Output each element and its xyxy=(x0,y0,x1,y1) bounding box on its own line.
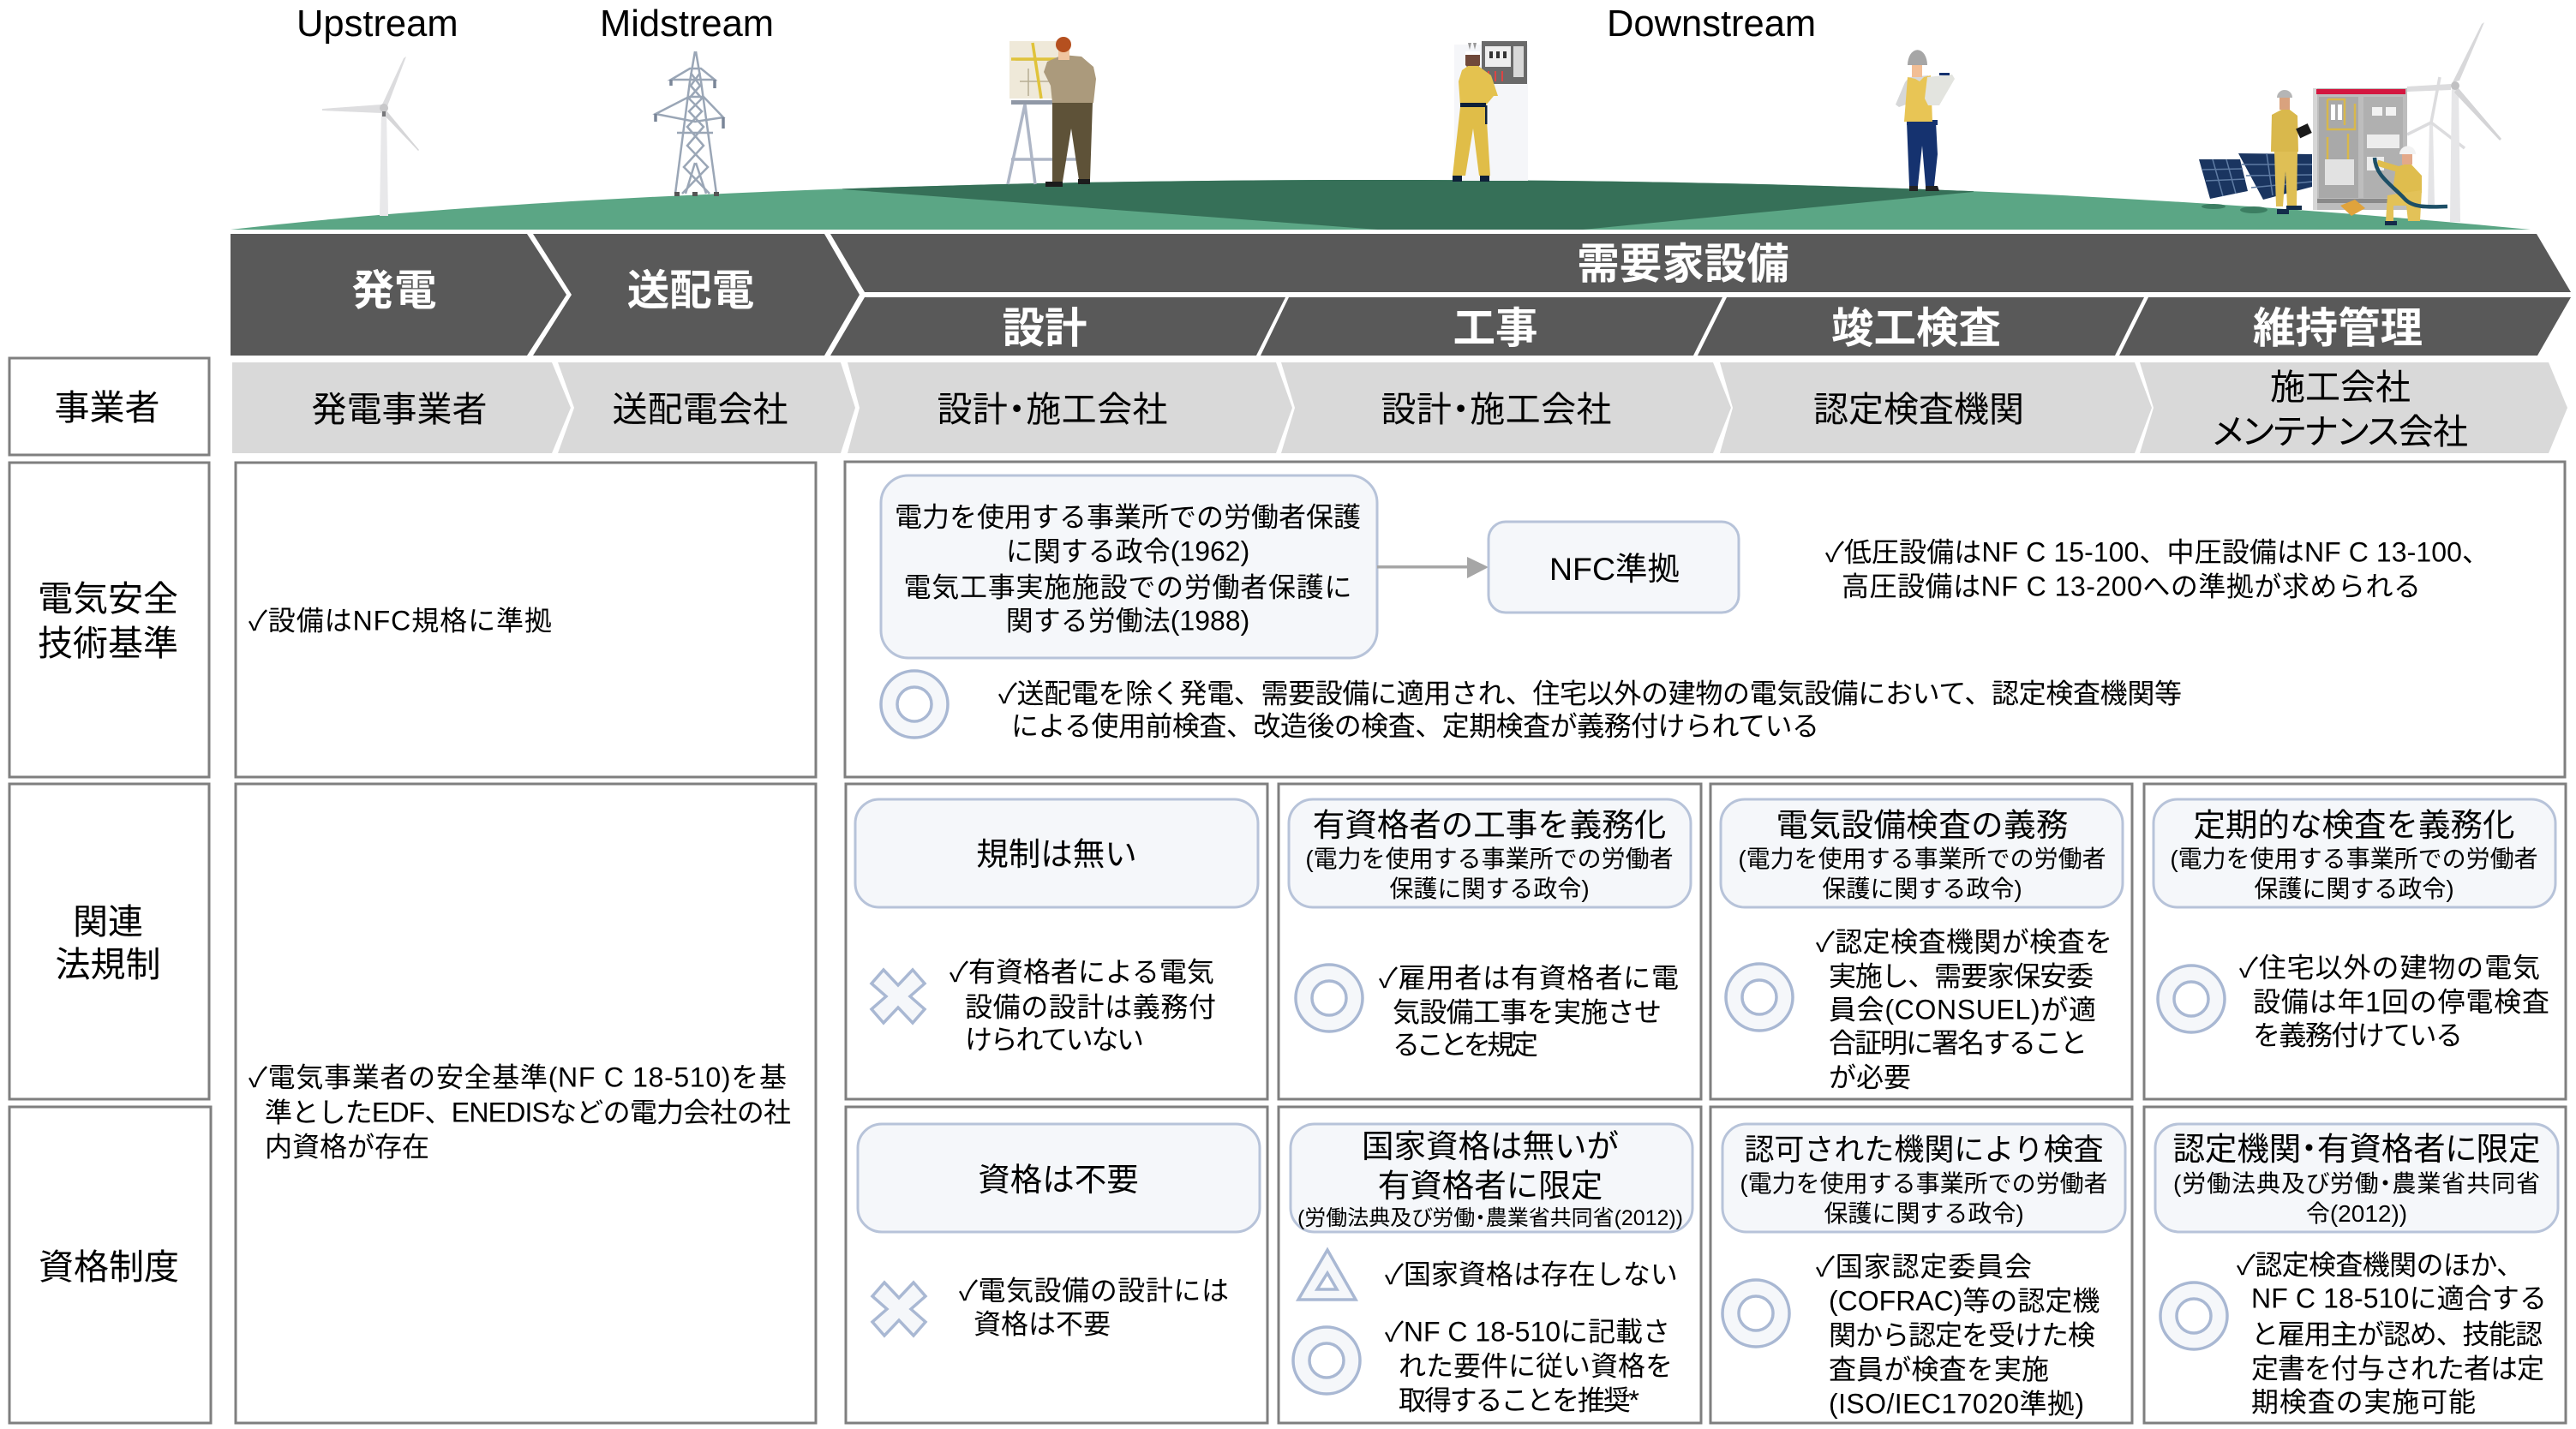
panel: regulation - construction xyxy=(1279,784,1701,1099)
text block: 実施し、需要家保安委 xyxy=(1829,961,2094,992)
heading: Midstream: Midstream xyxy=(600,3,774,45)
text block xyxy=(1816,1251,2100,1419)
callout: accredited and qualified: 令(2012)) xyxy=(2306,1200,2407,1227)
text block: 合証明に署名すること xyxy=(1829,1028,2088,1059)
callout: accredited bodies: 認可された機関により検査 xyxy=(1744,1133,2104,1167)
operator: maintenance: メンテナンス会社 xyxy=(2213,412,2468,451)
text block xyxy=(1379,963,1679,1061)
text block: ✓認定検査機関が検査を xyxy=(1816,927,2112,958)
green hill landscape xyxy=(231,180,2530,230)
text block: recommended qualification xyxy=(1385,1316,1673,1415)
large wind turbine xyxy=(2407,22,2501,222)
callout: no regulation: 規制は無い xyxy=(976,836,1137,872)
operator: construction xyxy=(1281,362,1731,453)
text block: を義務付けている xyxy=(2253,1019,2463,1050)
panel: regulation - maintenance xyxy=(2144,784,2566,1099)
value chain chevrons xyxy=(231,234,2571,356)
callout: inspection duty xyxy=(1721,799,2123,907)
row label: qualification system: 資格制度 xyxy=(39,1247,179,1287)
chevron: completion inspection: 竣工検査 xyxy=(1831,305,2001,352)
panel: regulation - design xyxy=(846,784,1267,1099)
callout: inspection duty: 保護に関する政令) xyxy=(1822,876,2022,902)
row label: electrical safety standards: 電気安全 xyxy=(38,579,178,619)
icon: electrician at panel xyxy=(1453,41,1528,182)
chevron: generation xyxy=(231,234,566,356)
electrical cabinet xyxy=(2313,88,2407,210)
panel: qualification - construction xyxy=(1279,1107,1701,1423)
panel: generation and grid standards: ✓設備はNFC規格に準拠 xyxy=(249,605,552,636)
operator: grid: 送配電会社 xyxy=(612,390,788,429)
heading: Downstream: Downstream xyxy=(1607,3,1816,45)
solar panels xyxy=(2199,153,2312,213)
text block: 期検査の実施可能 xyxy=(2251,1386,2476,1417)
panel: generation and grid regulation and qualification: 内資格が存在 xyxy=(265,1131,429,1162)
text block: けられていない xyxy=(965,1025,1144,1055)
text block: ることを規定 xyxy=(1393,1030,1538,1061)
chevron: customer facilities: 需要家設備 xyxy=(1577,241,1789,288)
operator: generation: 発電事業者 xyxy=(312,390,487,429)
chevron: construction xyxy=(1261,297,1722,356)
row label: related regulation xyxy=(9,784,209,1099)
text block: 資格は不要 xyxy=(973,1309,1111,1340)
text block: mandated inspections: ✓送配電を除く発電、需要設備に適用され、住宅以外の建物の電気設備において、認定検査機関等 xyxy=(998,679,2182,709)
chevron: maintenance xyxy=(2119,297,2571,356)
icon: renewable site with panels, cabinet, workers and turbines xyxy=(2199,22,2501,225)
chevron: transmission and distribution: 送配電 xyxy=(627,267,754,314)
operator: maintenance: 施工会社 xyxy=(2270,368,2411,407)
text block: ✓雇用者は有資格者に電 xyxy=(1379,963,1679,994)
text block: recommended qualification: 取得することを推奨* xyxy=(1399,1384,1639,1415)
row label: electrical safety standards: 技術基準 xyxy=(38,624,178,663)
icon: circle rating xyxy=(1293,1327,1360,1394)
chevron: customer facilities xyxy=(830,234,2571,292)
icon: cross rating xyxy=(872,1283,926,1336)
panel: qualification - maintenance xyxy=(2144,1107,2566,1423)
kneeling worker with hose xyxy=(2375,146,2447,225)
chevron: generation: 発電 xyxy=(351,267,437,314)
callout: periodic inspection: 定期的な検査を義務化 xyxy=(2194,807,2514,843)
callout: qualified work required xyxy=(1289,799,1691,907)
row label: qualification system xyxy=(9,1107,211,1423)
callout: accredited and qualified xyxy=(2155,1124,2558,1232)
text block: 員会(CONSUEL)が適 xyxy=(1829,994,2096,1025)
icon: circle rating xyxy=(1296,965,1363,1031)
callout: periodic inspection: (電力を使用する事業所での労働者 xyxy=(2170,846,2538,872)
callout: no regulation xyxy=(855,799,1258,907)
text block: 気設備工事を実施させ xyxy=(1393,997,1662,1028)
row label: related regulation: 法規制 xyxy=(55,945,161,984)
text block: voltage standards: 高圧設備はNF C 13-200への準拠が求められる xyxy=(1842,571,2421,601)
text block: 関から認定を受けた検 xyxy=(1829,1319,2095,1350)
panel: regulation - inspection xyxy=(1710,784,2132,1099)
standing worker xyxy=(2271,90,2312,214)
callout: accredited bodies xyxy=(1722,1124,2125,1232)
panel: generation and grid regulation and qualification: ✓電気事業者の安全基準(NF C 18-510)を基 xyxy=(249,1062,787,1093)
text block: recommended qualification: ✓NF C 18-510に記載さ xyxy=(1385,1316,1670,1347)
icon: circle rating xyxy=(881,671,948,738)
callout: limited to qualified persons xyxy=(1291,1124,1692,1232)
text block: mandated inspections xyxy=(998,679,2182,742)
callout: qualified work required: (電力を使用する事業所での労働者 xyxy=(1305,846,1674,872)
heading: Upstream: Upstream xyxy=(297,3,458,45)
text block: NF C 18-510に適合する xyxy=(2251,1283,2547,1314)
text block xyxy=(2237,1249,2547,1417)
callout: no qualification xyxy=(858,1124,1260,1232)
text block: mandated inspections: による使用前検査、改造後の検査、定期検査が義務付けられている xyxy=(1011,711,1819,742)
callout: inspection duty: (電力を使用する事業所での労働者 xyxy=(1738,846,2106,872)
chevron: completion inspection xyxy=(1698,297,2144,356)
callout: accredited and qualified: 認定機関・有資格者に限定 xyxy=(2173,1131,2540,1167)
text block xyxy=(959,1275,1229,1340)
icon: circle rating xyxy=(2160,1283,2227,1349)
text block: voltage standards xyxy=(1825,536,2489,601)
arrow xyxy=(1377,557,1489,578)
text block: と雇用主が認め、技能認 xyxy=(2251,1319,2543,1350)
text block: 定書を付与された者は定 xyxy=(2251,1354,2544,1384)
callout: limited to qualified persons: 有資格者に限定 xyxy=(1378,1168,1603,1204)
icon: wind turbine xyxy=(322,57,419,216)
callout: accredited bodies: (電力を使用する事業所での労働者 xyxy=(1740,1170,2108,1197)
callout: accredited bodies: 保護に関する政令) xyxy=(1824,1200,2024,1227)
panel: generation and grid regulation and qualification xyxy=(236,784,816,1423)
text block: ✓住宅以外の建物の電気 xyxy=(2239,953,2540,984)
chevron: transmission and distribution xyxy=(533,234,860,356)
callout: labour decrees: 電気工事実施施設での労働者保護に xyxy=(903,572,1352,603)
chevron: construction: 工事 xyxy=(1453,305,1537,352)
text block: (ISO/IEC17020準拠) xyxy=(1829,1388,2084,1419)
callout: labour decrees: に関する政令(1962) xyxy=(1006,536,1249,567)
operator: maintenance xyxy=(2140,362,2567,453)
panel: customer facility standards xyxy=(845,462,2565,777)
panel: qualification - design xyxy=(846,1107,1267,1423)
callout: labour decrees xyxy=(881,475,1377,658)
callout: qualified work required: 保護に関する政令) xyxy=(1389,876,1590,902)
callout: inspection duty: 電気設備検査の義務 xyxy=(1776,807,2069,843)
text block: ✓有資格者による電気 xyxy=(950,956,1214,987)
icon: transmission tower xyxy=(656,51,723,196)
row label: related regulation: 関連 xyxy=(73,902,143,942)
text block: 査員が検査を実施 xyxy=(1829,1354,2049,1384)
callout: limited to qualified persons: (労働法典及び労働・農業省共同省(2012)) xyxy=(1297,1206,1683,1230)
text block: 設備は年1回の停電検査 xyxy=(2253,987,2549,1018)
chevron: design xyxy=(830,297,1285,356)
text block xyxy=(950,956,1216,1055)
icon: circle rating xyxy=(1722,1280,1789,1347)
icon: circle rating xyxy=(2158,966,2225,1032)
callout: no qualification: 資格は不要 xyxy=(978,1162,1139,1198)
operator: inspection: 認定検査機関 xyxy=(1813,390,2024,429)
icon: cross rating xyxy=(872,970,925,1023)
text block: no national qualification: ✓国家資格は存在しない xyxy=(1385,1259,1678,1290)
icon: inspector with clipboard xyxy=(1896,50,1955,191)
text block: が必要 xyxy=(1829,1062,1911,1093)
row label: electrical safety standards xyxy=(9,463,209,777)
text block: 設備の設計は義務付 xyxy=(965,992,1216,1023)
operator: generation xyxy=(232,362,571,453)
operator: construction: 設計・施工会社 xyxy=(1381,390,1611,429)
text block xyxy=(1816,927,2112,1093)
chevron: maintenance: 維持管理 xyxy=(2253,305,2423,352)
operator: design: 設計・施工会社 xyxy=(938,390,1167,429)
small wind turbine xyxy=(2407,77,2465,206)
operator: design xyxy=(848,362,1292,453)
panel: generation and grid regulation and qualification: 準としたEDF、ENEDISなどの電力会社の社 xyxy=(265,1097,791,1127)
icon: circle rating xyxy=(1726,964,1793,1031)
callout: NFC compliance xyxy=(1489,522,1739,613)
row label: operators: 事業者 xyxy=(55,388,159,428)
callout: periodic inspection: 保護に関する政令) xyxy=(2254,876,2454,902)
text block xyxy=(2239,953,2549,1050)
operator: inspection xyxy=(1720,362,2152,453)
text block: recommended qualification: れた要件に従い資格を xyxy=(1399,1350,1673,1381)
row label: operators xyxy=(9,358,209,455)
panel: generation and grid standards xyxy=(236,463,816,777)
operators chevron band xyxy=(232,362,2567,453)
text block: ✓電気設備の設計には xyxy=(959,1275,1229,1306)
text block: ✓国家認定委員会 xyxy=(1816,1251,2032,1282)
chevron: design: 設計 xyxy=(1003,305,1087,352)
callout: NFC compliance: NFC準拠 xyxy=(1549,551,1680,587)
callout: labour decrees: 電力を使用する事業所での労働者保護 xyxy=(895,502,1361,533)
operator: grid xyxy=(558,362,855,453)
text block: voltage standards: ✓低圧設備はNF C 15-100、中圧設備はNF C 13-100、 xyxy=(1825,536,2489,567)
callout: accredited and qualified: (労働法典及び労働・農業省共同省 xyxy=(2173,1170,2540,1197)
callout: labour decrees: 関する労働法(1988) xyxy=(1006,605,1249,636)
icon: designer at drafting board xyxy=(1008,37,1096,187)
panel: qualification - inspection xyxy=(1710,1107,2132,1423)
callout: qualified work required: 有資格者の工事を義務化 xyxy=(1313,807,1666,843)
callout: periodic inspection xyxy=(2154,799,2555,907)
icon: triangle rating xyxy=(1298,1250,1356,1300)
callout: limited to qualified persons: 国家資格は無いが xyxy=(1362,1128,1619,1164)
tool case xyxy=(2340,200,2365,216)
text block: (COFRAC)等の認定機 xyxy=(1829,1285,2100,1316)
text block: ✓認定検査機関のほか、 xyxy=(2237,1249,2524,1280)
